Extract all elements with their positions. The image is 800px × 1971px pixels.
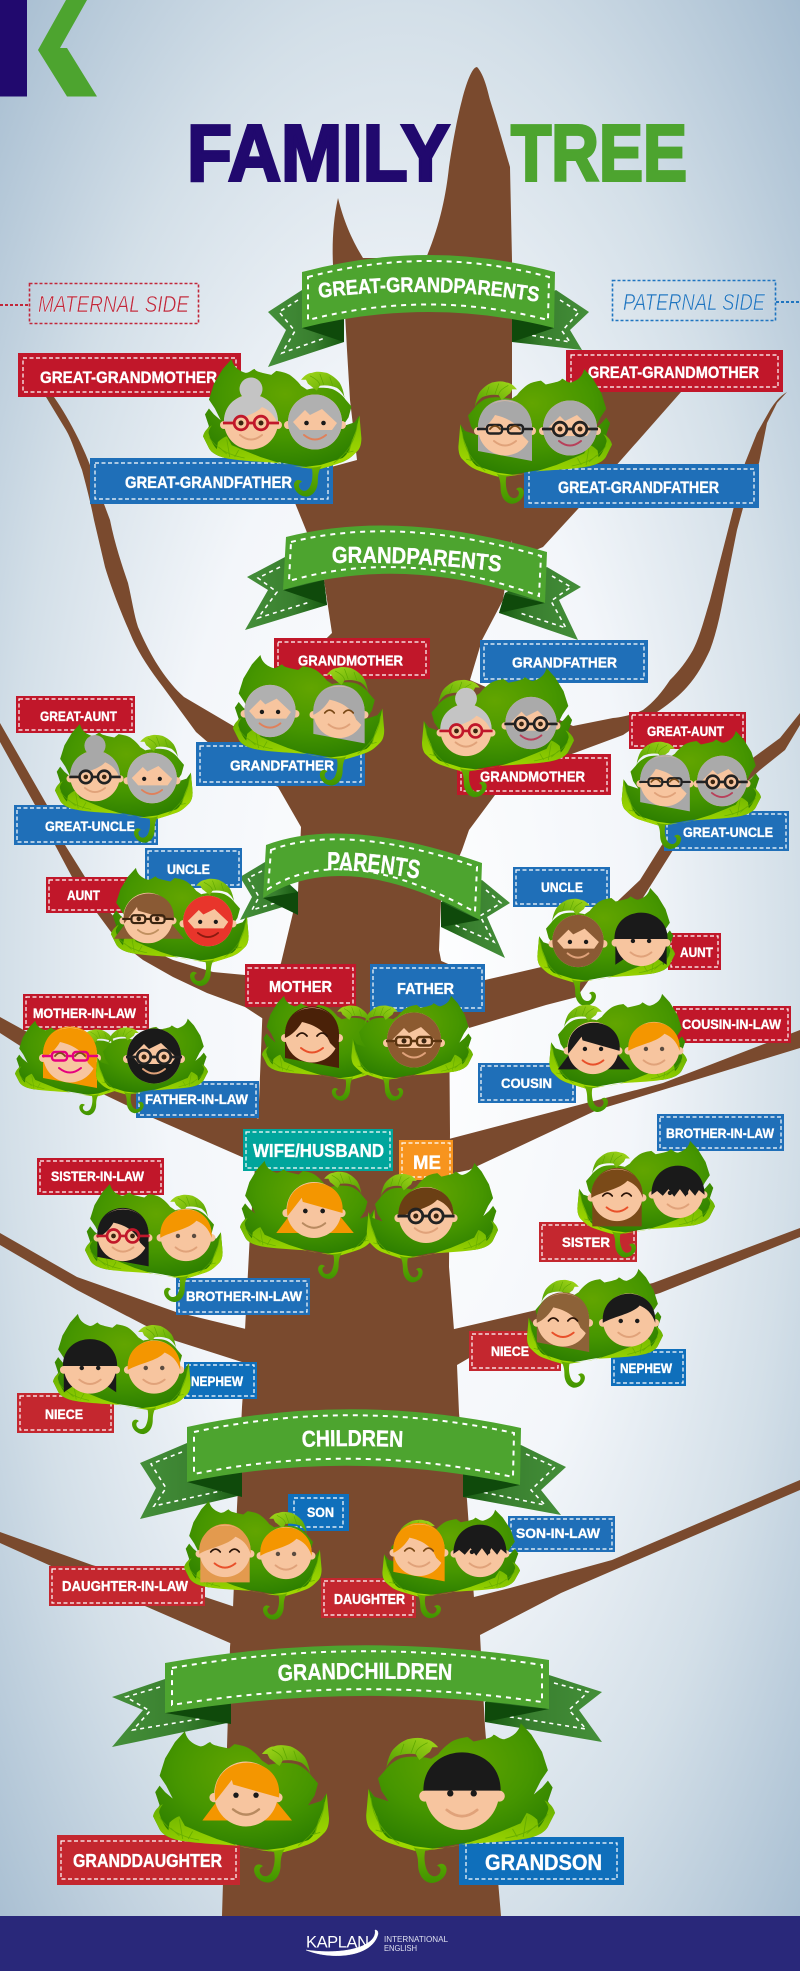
banner: children — [140, 1409, 566, 1519]
label: grandmother maternal — [274, 638, 430, 679]
label: great-aunt paternal — [629, 712, 746, 749]
label: mother: MOTHER — [269, 979, 332, 996]
label: cousin-in-law — [673, 1006, 791, 1043]
label: uncle paternal: UNCLE — [541, 879, 583, 895]
face: great-grandfather — [284, 394, 346, 450]
label: cousin: COUSIN — [501, 1075, 552, 1091]
footer logo: Kaplan International English — [306, 1930, 448, 1956]
banner: great-grandparents — [268, 255, 589, 367]
label: aunt paternal — [668, 933, 721, 970]
label: father-in-law — [136, 1081, 259, 1118]
banner: grandchildren — [112, 1645, 602, 1747]
label: great-uncle maternal: GREAT-UNCLE — [45, 818, 135, 834]
label: aunt maternal: AUNT — [67, 887, 100, 903]
face: nephew — [60, 1339, 120, 1394]
banner: grandparents — [245, 526, 581, 640]
branch: in-laws left — [0, 1017, 262, 1160]
face: granddaughter — [202, 1762, 292, 1826]
leaf pair: aunt and uncle maternal — [111, 868, 249, 986]
leaf: mother-in-law — [15, 1021, 127, 1115]
banner: grandparents: GRANDPARENTS — [332, 546, 502, 572]
leaf pair: cousin and cousin-in-law — [549, 994, 687, 1112]
side tag: paternal — [612, 280, 800, 320]
label: wife/husband — [243, 1129, 393, 1171]
branch: aunts right — [439, 713, 800, 1028]
logo mark: Kaplan K — [0, 0, 97, 96]
face: wife or husband — [276, 1182, 354, 1238]
label: nephew paternal: NEPHEW — [620, 1360, 673, 1376]
face: great-grandfather — [539, 400, 601, 456]
label: great-aunt maternal: GREAT-AUNT — [40, 708, 117, 724]
face: great-uncle — [693, 756, 751, 806]
label: son-in-law: SON-IN-LAW — [516, 1525, 601, 1541]
label: father: FATHER — [397, 981, 454, 998]
label: me — [399, 1140, 453, 1180]
leaf pair: son and daughter-in-law — [184, 1501, 322, 1620]
footer logo: Kaplan International English: INTERNATIONAL — [384, 1934, 448, 1944]
leaf: wife or husband — [240, 1161, 376, 1279]
face: great-grandmother — [474, 400, 536, 461]
label: great-grandfather paternal — [524, 464, 759, 508]
label: great-grandmother paternal — [566, 350, 783, 392]
label: great-grandfather maternal — [90, 458, 333, 504]
label: niece maternal — [17, 1393, 114, 1433]
label: sister-in-law — [37, 1158, 164, 1195]
label: nephew maternal — [184, 1362, 257, 1399]
label: nephew maternal: NEPHEW — [191, 1373, 244, 1389]
leaf: father — [351, 996, 473, 1101]
label: great-aunt paternal: GREAT-AUNT — [647, 723, 724, 739]
leaf pair: great-aunt and great-uncle maternal — [55, 724, 193, 843]
leaf pair: great-grandparents paternal — [458, 369, 612, 504]
label: grandfather paternal — [480, 640, 648, 683]
face: daughter — [390, 1523, 448, 1581]
title word: TREE: TREE — [511, 108, 687, 198]
label: nephew paternal — [611, 1349, 686, 1386]
label: brother-in-law maternal: BROTHER-IN-LAW — [186, 1288, 303, 1304]
label: daughter-in-law: DAUGHTER-IN-LAW — [62, 1579, 188, 1595]
label: aunt maternal — [46, 877, 128, 913]
face: me — [394, 1187, 458, 1243]
label: daughter-in-law — [49, 1566, 205, 1606]
leaf pair: aunt and uncle paternal — [537, 888, 675, 1006]
leaf: grandson — [366, 1723, 555, 1883]
label: brother-in-law paternal — [657, 1114, 784, 1151]
label: great-grandmother paternal: GREAT-GRANDMOTHER — [588, 363, 759, 382]
label: me: ME — [413, 1153, 441, 1174]
leaf pair: sister and brother-in-law — [577, 1141, 715, 1258]
leaf: me — [367, 1163, 498, 1282]
leaf pair: niece and nephew maternal — [53, 1314, 191, 1434]
label: mother-in-law: MOTHER-IN-LAW — [33, 1005, 137, 1021]
face: brother-in-law — [157, 1209, 215, 1261]
label: brother-in-law maternal — [176, 1278, 310, 1315]
label: great-grandmother maternal — [18, 353, 241, 397]
face: daughter-in-law — [196, 1524, 254, 1582]
face: grandmother — [310, 685, 368, 743]
banner: parents: PARENTS — [328, 852, 420, 878]
label: aunt paternal: AUNT — [680, 944, 713, 960]
face: cousin-in-law — [625, 1022, 683, 1074]
label: grandmother maternal: GRANDMOTHER — [298, 652, 403, 670]
branch: far left great-grandparents — [46, 397, 340, 787]
footer logo: Kaplan International English: ENGLISH — [384, 1943, 417, 1953]
face: uncle — [179, 896, 237, 946]
leaf pair: great-grandparents maternal — [203, 359, 361, 497]
face: great-aunt — [66, 735, 124, 801]
face: great-uncle — [123, 753, 181, 803]
leaf: granddaughter — [153, 1731, 329, 1883]
side tag: maternal: MATERNAL SIDE — [38, 291, 190, 317]
label: son-in-law — [508, 1516, 615, 1552]
branch: siblings left — [0, 1233, 250, 1363]
face: brother-in-law — [649, 1166, 707, 1218]
label: great-uncle paternal — [664, 811, 789, 851]
label: cousin — [478, 1063, 576, 1103]
label: sister-in-law: SISTER-IN-LAW — [51, 1168, 145, 1184]
face: aunt — [114, 893, 184, 943]
label: great-aunt maternal — [16, 696, 135, 733]
face: great-aunt — [636, 755, 694, 811]
label: brother-in-law paternal: BROTHER-IN-LAW — [666, 1125, 775, 1141]
side tag: paternal: PATERNAL SIDE — [623, 289, 766, 315]
label: granddaughter: GRANDDAUGHTER — [73, 1851, 222, 1871]
trunk — [222, 67, 512, 1916]
branch: far right great-grandparents — [470, 392, 787, 770]
title word: FAMILY: FAMILY — [187, 108, 450, 198]
banner: grandchildren: GRANDCHILDREN — [278, 1662, 452, 1682]
label: great-uncle paternal: GREAT-UNCLE — [683, 824, 773, 840]
label: great-uncle maternal — [14, 805, 158, 845]
face: sister-in-law — [94, 1208, 152, 1266]
face: niece — [533, 1292, 593, 1352]
label: wife/husband: WIFE/HUSBAND — [253, 1140, 384, 1161]
label: son: SON — [307, 1504, 334, 1520]
face: nephew — [599, 1293, 659, 1347]
label: grandson: GRANDSON — [485, 1850, 602, 1875]
leaf pair: great-aunt and great-uncle paternal — [622, 731, 761, 849]
label: grandfather maternal — [196, 742, 365, 786]
branch: cousin right — [445, 1030, 800, 1175]
label: niece maternal: NIECE — [45, 1406, 83, 1422]
label: daughter — [321, 1578, 416, 1618]
label: mother — [245, 964, 356, 1007]
leaf pair: daughter and son-in-law — [382, 1510, 520, 1618]
label: cousin-in-law: COUSIN-IN-LAW — [682, 1016, 782, 1032]
face: uncle — [549, 915, 607, 967]
face: mother — [281, 1006, 343, 1068]
leaf pair: grandparents maternal — [233, 655, 384, 786]
label: grandmother paternal: GRANDMOTHER — [480, 768, 585, 786]
label: granddaughter — [57, 1835, 240, 1885]
face: aunt — [612, 913, 670, 966]
footer band — [0, 1916, 800, 1971]
label: uncle maternal: UNCLE — [167, 861, 210, 877]
label: father-in-law: FATHER-IN-LAW — [145, 1091, 249, 1107]
branch: children left — [0, 1532, 238, 1645]
face: great-grandmother — [220, 378, 282, 450]
banner: great-grandparents: GREAT-GRANDPARENTS — [318, 277, 540, 302]
label: sister — [539, 1222, 637, 1262]
label: father — [370, 964, 485, 1012]
face: mother-in-law — [39, 1026, 101, 1088]
label: niece paternal — [469, 1331, 561, 1371]
label: grandfather paternal: GRANDFATHER — [512, 654, 617, 672]
face: grandfather — [502, 697, 560, 749]
title — [187, 108, 687, 198]
label: grandfather maternal: GRANDFATHER — [230, 758, 334, 774]
face: father-in-law — [123, 1028, 185, 1084]
face: grandmother — [437, 688, 495, 756]
face: niece — [124, 1340, 184, 1394]
branch: siblings right — [450, 1228, 800, 1368]
label: grandmother paternal — [457, 754, 611, 795]
label: uncle maternal — [145, 848, 242, 888]
label: uncle paternal — [513, 867, 610, 907]
leaf pair: niece and nephew paternal — [527, 1269, 663, 1388]
footer logo: Kaplan International English: KAPLAN — [306, 1934, 369, 1952]
face: son — [257, 1527, 315, 1579]
label: niece paternal: NIECE — [491, 1343, 529, 1359]
face: sister — [588, 1168, 646, 1226]
leaf pair: sister-in-law and brother-in-law — [85, 1184, 223, 1302]
face: grandson — [419, 1752, 505, 1830]
banner: parents — [240, 834, 510, 958]
side tag: maternal — [0, 284, 198, 324]
label: daughter: DAUGHTER — [334, 1592, 405, 1608]
face: son-in-law — [451, 1525, 509, 1577]
label: great-grandfather paternal: GREAT-GRANDFATHER — [558, 478, 719, 497]
branch: children right — [470, 1480, 800, 1638]
label: mother-in-law — [23, 994, 149, 1030]
label: son — [288, 1494, 349, 1531]
branch: upper right — [512, 385, 681, 560]
label: grandson — [459, 1837, 624, 1885]
face: father — [383, 1012, 445, 1068]
branch: aunts left — [0, 723, 290, 1020]
leaf: father-in-law — [96, 1019, 208, 1113]
label: great-grandfather maternal: GREAT-GRANDFATHER — [125, 473, 292, 492]
label: sister: SISTER — [562, 1234, 610, 1250]
face: cousin — [558, 1022, 630, 1074]
face: grandfather — [241, 685, 299, 737]
banner: children: CHILDREN — [302, 1430, 402, 1448]
label: great-grandmother maternal: GREAT-GRANDMOTHER — [40, 368, 217, 387]
leaf pair: grandparents paternal — [422, 668, 574, 797]
leaf: mother — [262, 996, 384, 1101]
